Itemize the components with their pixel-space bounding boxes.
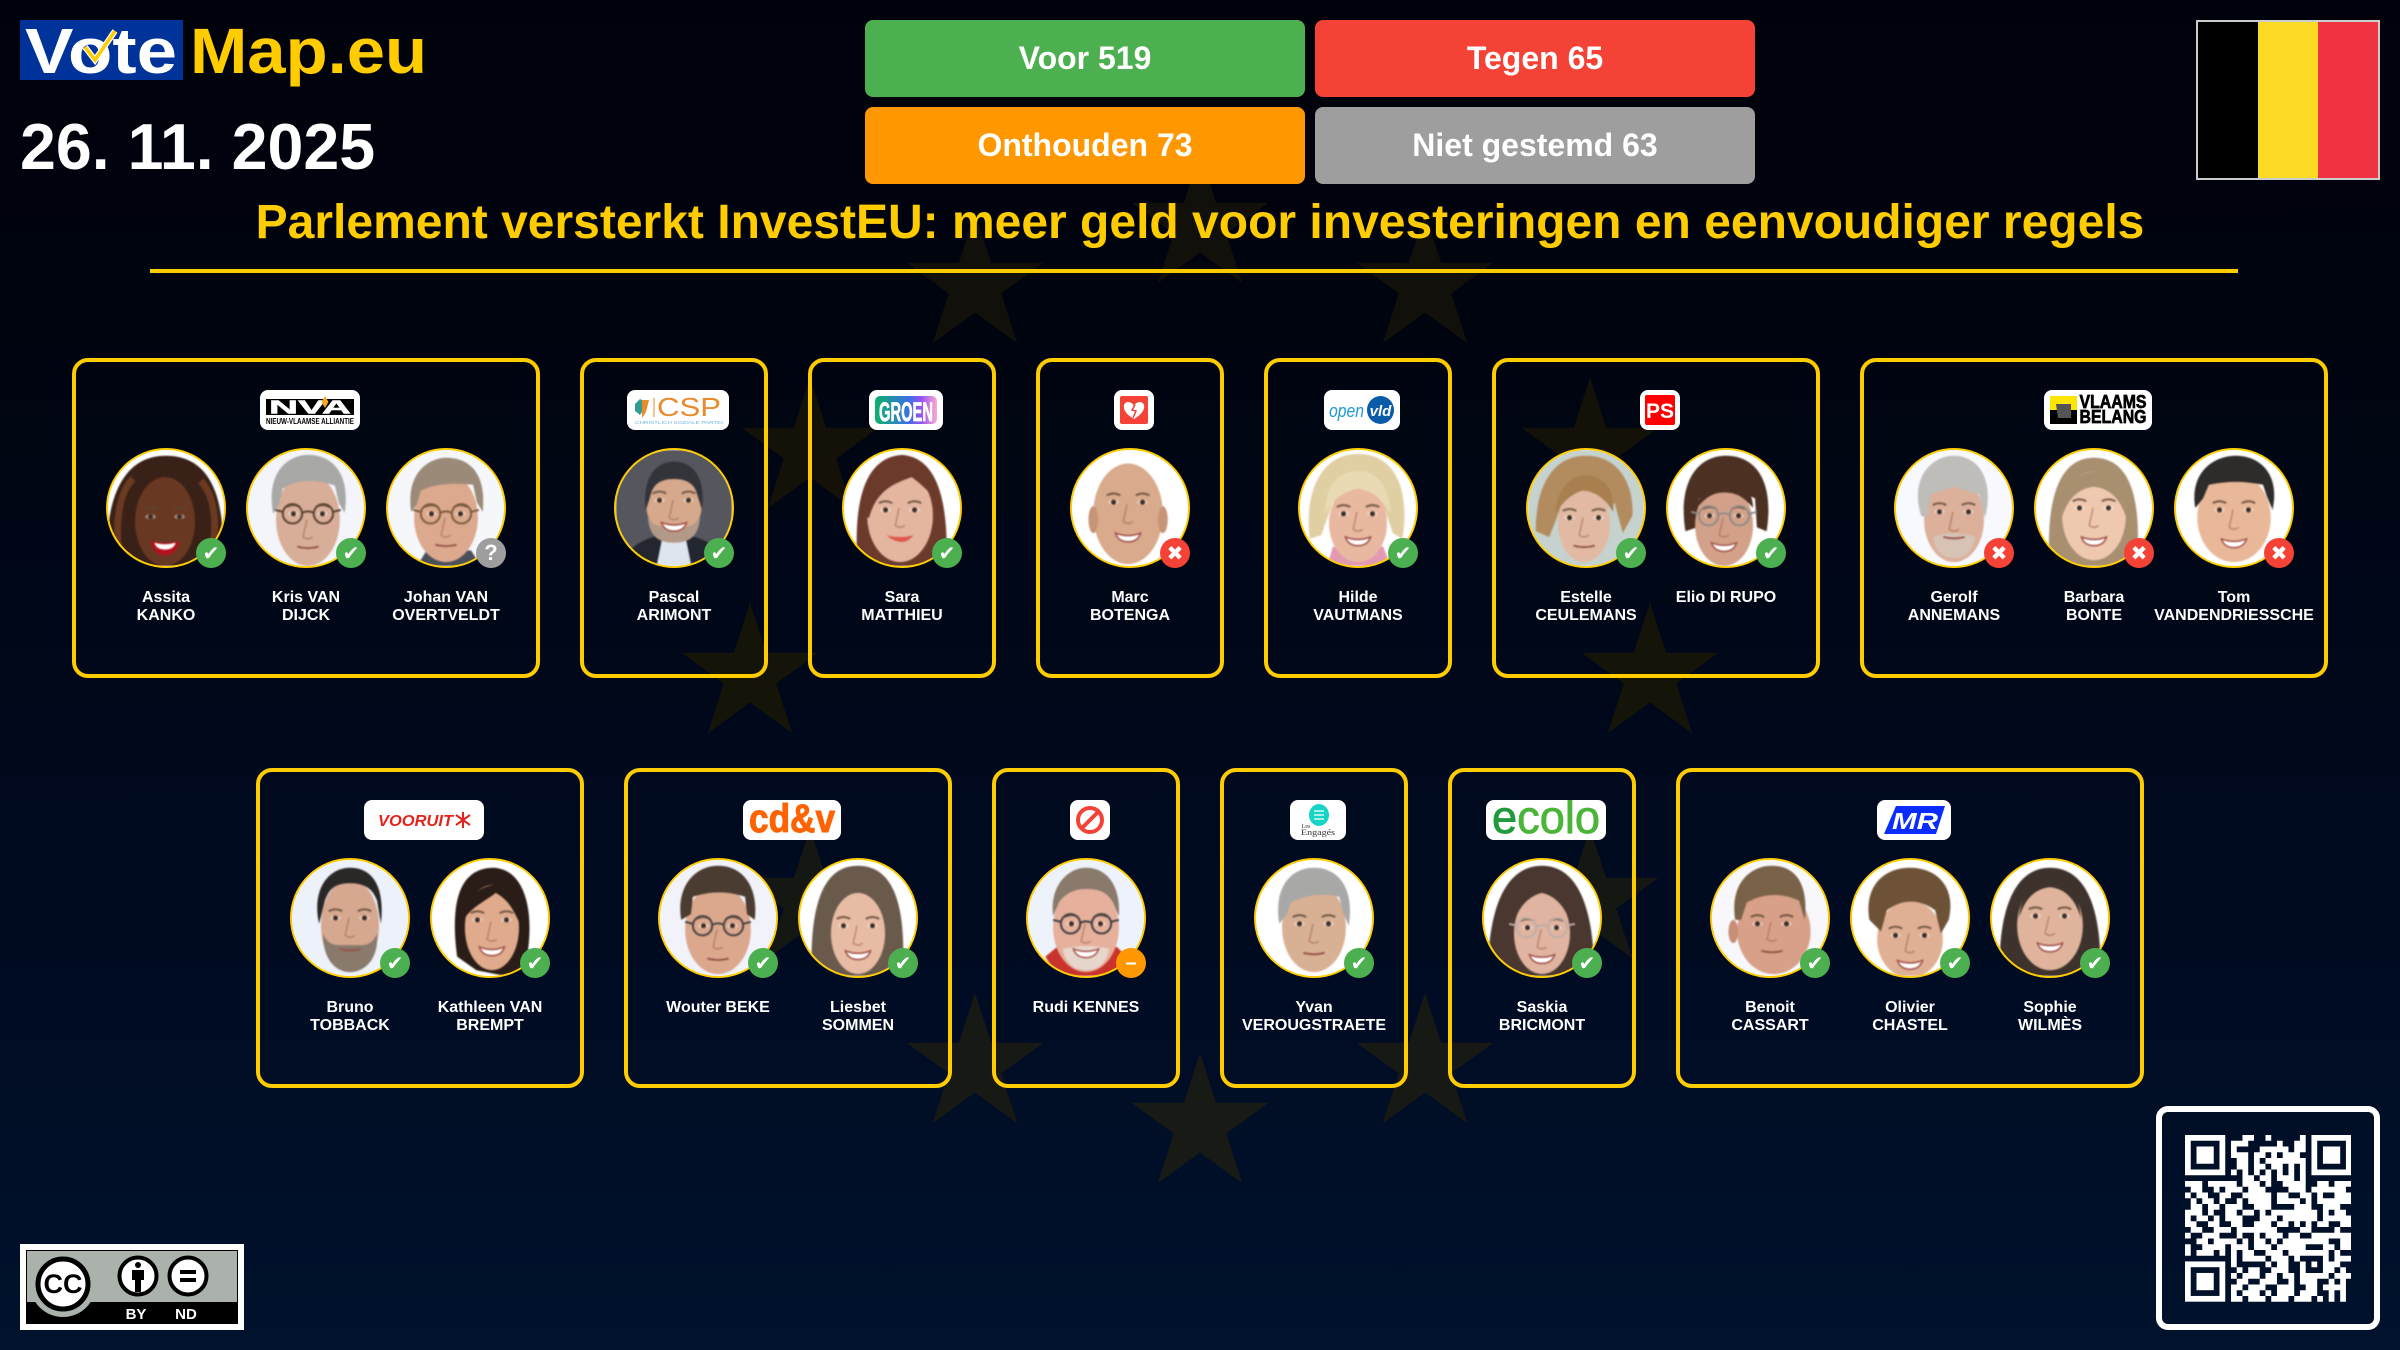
member: Marc Botenga: ✖ <box>1167 541 1183 565</box>
member: Johan Van Overtveldt <box>386 448 506 624</box>
party logo: PS: PS <box>1646 400 1674 423</box>
member: Sophie Wilmès: Sophie <box>2023 999 2077 1016</box>
member: Elio Di Rupo <box>1666 448 1786 606</box>
member: Kris Van Dijck: DIJCK <box>282 607 330 624</box>
member: Liesbet Sommen <box>798 858 918 1034</box>
vote count: for <box>865 20 1305 97</box>
party logo: CSP: CHRISTLICH SOZIALE PARTEI <box>635 420 723 425</box>
member: Liesbet Sommen: ✔ <box>895 951 911 975</box>
vote count: abstain: Onthouden 73 <box>977 127 1193 163</box>
party logo: MR: MR <box>1892 808 1938 834</box>
logo: VoteMap.eu <box>20 20 427 87</box>
member: Bruno Tobback <box>290 858 410 1034</box>
license badge: CC BY-ND: CC <box>44 1269 82 1299</box>
party logo: Vooruit <box>364 800 484 840</box>
title: Parlement versterkt InvestEU: meer geld voor investeringen en eenvoudiger regels <box>256 196 2144 249</box>
QR code <box>2156 1106 2380 1330</box>
member: Johan Van Overtveldt: OVERTVELDT <box>392 607 500 624</box>
panel: MR <box>1676 768 2144 1088</box>
member: Wouter Beke <box>658 858 778 1016</box>
member: Gerolf Annemans: ✖ <box>1991 541 2007 565</box>
party logo: CSP: CSP <box>657 392 721 422</box>
member: Pascal Arimont: Pascal <box>649 589 699 606</box>
member: Estelle Ceulemans <box>1526 448 1646 624</box>
party logo: PS <box>1640 390 1680 430</box>
member: Kathleen Van Brempt: BREMPT <box>456 1017 524 1034</box>
member: Tom Vandendriessche: VANDENDRIESSCHE <box>2154 607 2314 624</box>
party logo: CSP <box>627 390 729 430</box>
member: Marc Botenga: BOTENGA <box>1090 607 1170 624</box>
flag: Belgium <box>2196 20 2380 180</box>
member: Estelle Ceulemans: Estelle <box>1560 589 1612 606</box>
license badge: CC BY-ND: BY <box>126 1306 146 1323</box>
license badge: CC BY-ND <box>20 1244 244 1330</box>
member: Assita Kanko: ✔ <box>203 541 219 565</box>
panel: PVDA <box>1036 358 1224 678</box>
party logo: Vooruit: VOORUIT <box>378 813 454 830</box>
panel: Les Engagés <box>1220 768 1408 1088</box>
member: Hilde Vautmans: VAUTMANS <box>1313 607 1403 624</box>
member: Yvan Verougstraete: ✔ <box>1351 951 1367 975</box>
party logo: PVDA <box>1114 390 1154 430</box>
vote count: against: Tegen 65 <box>1467 40 1603 76</box>
member: Saskia Bricmont: ✔ <box>1579 951 1595 975</box>
member: Hilde Vautmans <box>1298 448 1418 624</box>
party logo: Open VLD <box>1324 390 1400 430</box>
member: Pascal Arimont: ✔ <box>711 541 727 565</box>
member: Liesbet Sommen: SOMMEN <box>822 1017 894 1034</box>
party logo: Groen <box>869 390 943 430</box>
member: Yvan Verougstraete: Yvan <box>1295 999 1333 1016</box>
member: Olivier Chastel <box>1850 858 1970 1034</box>
member: Saskia Bricmont: Saskia <box>1517 999 1567 1016</box>
member: Rudi Kennes: – <box>1125 952 1137 974</box>
member: Barbara Bonte <box>2034 448 2154 624</box>
panel: CSP <box>580 358 768 678</box>
member: Yvan Verougstraete: VEROUGSTRAETE <box>1242 1017 1386 1034</box>
member: Kathleen Van Brempt: Kathleen VAN <box>438 999 542 1016</box>
panel: cd&v <box>624 768 952 1088</box>
member: Wouter Beke: ✔ <box>755 951 771 975</box>
member: Tom Vandendriessche <box>2154 448 2314 624</box>
party logo: Open VLD: vld <box>1370 403 1392 420</box>
member: Assita Kanko: KANKO <box>137 607 195 624</box>
party logo: MR <box>1877 800 1951 840</box>
member: Sophie Wilmès: ✔ <box>2087 951 2103 975</box>
vote count: for: Voor 519 <box>1019 40 1151 76</box>
member: Johan Van Overtveldt: Johan VAN <box>404 589 488 606</box>
member: Assita Kanko <box>106 448 226 624</box>
panel: Groen <box>808 358 996 678</box>
member: Kathleen Van Brempt: ✔ <box>527 951 543 975</box>
member: Hilde Vautmans: ✔ <box>1395 541 1411 565</box>
member: Bruno Tobback: ✔ <box>387 951 403 975</box>
member: Bruno Tobback: Bruno <box>326 999 374 1016</box>
panel: PS <box>1492 358 1820 678</box>
vote count: against <box>1315 20 1755 97</box>
member: Marc Botenga <box>1070 448 1190 624</box>
member: Gerolf Annemans: ANNEMANS <box>1908 607 2000 624</box>
member: Barbara Bonte: ✖ <box>2131 541 2147 565</box>
vote count: did not vote <box>1315 107 1755 184</box>
member: Sara Matthieu: MATTHIEU <box>861 607 943 624</box>
member: Estelle Ceulemans: ✔ <box>1623 541 1639 565</box>
member: Sophie Wilmès: WILMÈS <box>2018 1017 2082 1034</box>
member: Johan Van Overtveldt: ? <box>484 540 498 565</box>
member: Benoit Cassart <box>1710 858 1830 1034</box>
party logo: Les Engagés <box>1290 800 1346 840</box>
vote count: did not vote: Niet gestemd 63 <box>1412 127 1658 163</box>
member: Sara Matthieu: Sara <box>885 589 919 606</box>
member: Rudi Kennes: Rudi KENNES <box>1033 999 1139 1016</box>
vote count: abstain <box>865 107 1305 184</box>
member: Gerolf Annemans: Gerolf <box>1930 589 1978 606</box>
member: Barbara Bonte: BONTE <box>2066 607 2122 624</box>
party logo: N-VA: NVA <box>269 398 351 418</box>
member: Wouter Beke: Wouter BEKE <box>666 999 770 1016</box>
panel: Ecolo <box>1448 768 1636 1088</box>
member: Liesbet Sommen: Liesbet <box>830 999 886 1016</box>
member: Pascal Arimont: ARIMONT <box>637 607 711 624</box>
party logo: Vlaams Belang <box>2044 390 2152 430</box>
panel: independent <box>992 768 1180 1088</box>
member: Bruno Tobback: TOBBACK <box>310 1017 390 1034</box>
member: Estelle Ceulemans: CEULEMANS <box>1535 607 1637 624</box>
member: Olivier Chastel: ✔ <box>1947 951 1963 975</box>
member: Pascal Arimont <box>614 448 734 624</box>
member: Tom Vandendriessche: ✖ <box>2271 541 2287 565</box>
member: Hilde Vautmans: Hilde <box>1338 589 1378 606</box>
party logo: Les Engagés: Les <box>1302 824 1311 830</box>
member: Benoit Cassart: ✔ <box>1807 951 1823 975</box>
panel: N-VA <box>72 358 540 678</box>
member: Saskia Bricmont: BRICMONT <box>1499 1017 1585 1034</box>
party logo: N-VA <box>260 390 360 430</box>
member: Sara Matthieu: ✔ <box>939 541 955 565</box>
member: Saskia Bricmont <box>1482 858 1602 1034</box>
member: Olivier Chastel: Olivier <box>1885 999 1935 1016</box>
member: Olivier Chastel: CHASTEL <box>1872 1017 1948 1034</box>
member: Kris Van Dijck: Kris VAN <box>272 589 340 606</box>
member: Benoit Cassart: CASSART <box>1731 1017 1809 1034</box>
member: Elio Di Rupo: ✔ <box>1763 541 1779 565</box>
member: Kris Van Dijck: ✔ <box>343 541 359 565</box>
member: Kathleen Van Brempt <box>430 858 550 1034</box>
member: Benoit Cassart: Benoit <box>1745 999 1795 1016</box>
member: Barbara Bonte: Barbara <box>2064 589 2124 606</box>
member: Tom Vandendriessche: Tom <box>2218 589 2250 606</box>
panel: Vooruit <box>256 768 584 1088</box>
license badge: CC BY-ND: ND <box>175 1306 197 1323</box>
member: Assita Kanko: Assita <box>142 589 190 606</box>
party logo: independent <box>1070 800 1110 840</box>
party logo: Les Engagés: Engagés <box>1301 828 1335 837</box>
member: Elio Di Rupo: Elio DI RUPO <box>1676 589 1776 606</box>
panel: Vlaams Belang <box>1860 358 2328 678</box>
member: Yvan Verougstraete <box>1242 858 1386 1034</box>
member: Sara Matthieu <box>842 448 962 624</box>
member: Rudi Kennes <box>1026 858 1146 1016</box>
member: Sophie Wilmès <box>1990 858 2110 1034</box>
member: Kris Van Dijck <box>246 448 366 624</box>
date: 26. 11. 2025 <box>20 111 375 183</box>
member: Marc Botenga: Marc <box>1111 589 1149 606</box>
party logo: Open VLD: open <box>1329 401 1364 421</box>
member: Gerolf Annemans <box>1894 448 2014 624</box>
panel: Open VLD <box>1264 358 1452 678</box>
